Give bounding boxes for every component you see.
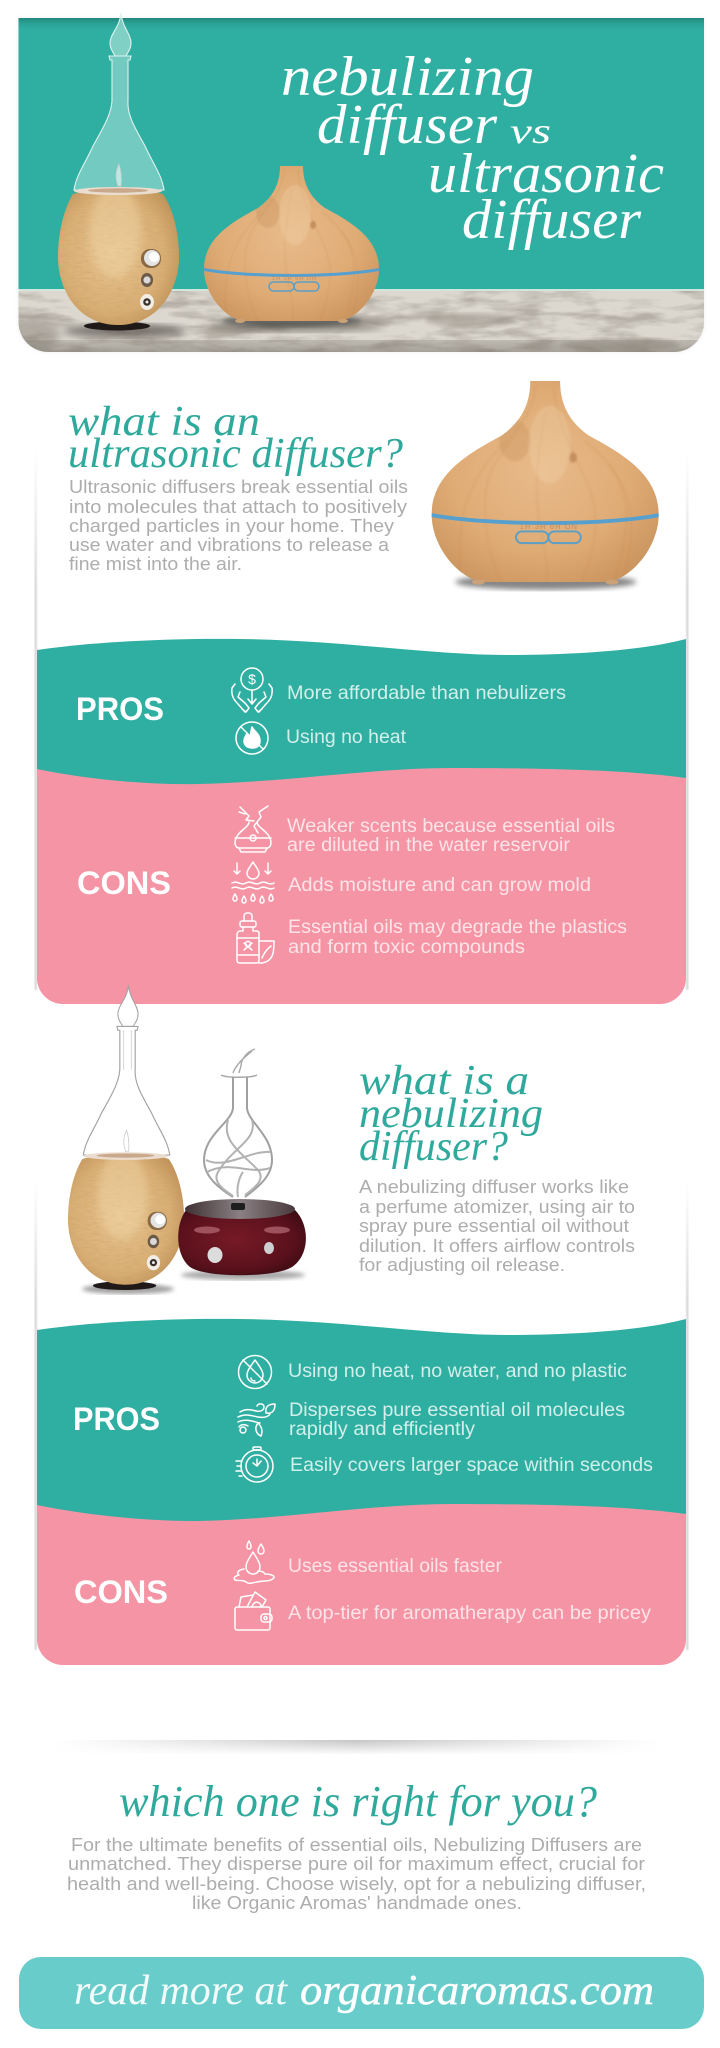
heading: which one is right for you: which one is right for you? xyxy=(119,1777,597,1826)
heading: what is a nebulizing diffuser: diffuser? xyxy=(359,1124,508,1170)
text block: ultrasonic description: use water and vibrations to release a xyxy=(69,535,390,555)
text: weaker scents: are diluted in the water reservoir xyxy=(287,835,571,856)
title: vs xyxy=(510,111,551,151)
title xyxy=(281,46,664,251)
text block: conclusion: For the ultimate benefits of essential oils, Nebulizing Diffusers are xyxy=(71,1835,642,1855)
image: nebulizing diffuser xyxy=(55,13,183,330)
text: weaker scents xyxy=(287,816,615,856)
text block: nebulizing description: for adjusting oil release. xyxy=(359,1255,565,1275)
icon: moisture xyxy=(232,862,274,903)
heading: what is a nebulizing diffuser: what is a xyxy=(359,1058,529,1104)
text: easily covers: Easily covers larger space within seconds xyxy=(290,1455,653,1476)
call to action banner xyxy=(19,1957,704,2029)
heading: what is an ultrasonic diffuser: ultrasonic diffuser? xyxy=(68,431,403,477)
icon: oil drops and puddle xyxy=(234,1541,274,1583)
text: essential oils degrade: and form toxic compounds xyxy=(288,937,525,958)
panel: nebulizing section xyxy=(34,985,688,1665)
panel: ultrasonic section xyxy=(34,381,688,1004)
text: disperses pure oil: rapidly and efficiently xyxy=(289,1419,476,1440)
icon: cracked diffuser xyxy=(235,806,271,852)
text block: conclusion xyxy=(67,1835,646,1913)
text block: ultrasonic description: into molecules that attach to positively xyxy=(69,497,407,517)
text block: ultrasonic description xyxy=(69,477,408,574)
text block: nebulizing description: spray pure essential oil without xyxy=(359,1216,629,1236)
heading: what is an ultrasonic diffuser: what is an xyxy=(68,399,260,445)
icon: oil bottle and leaf xyxy=(237,913,274,963)
image: nebulizing diffuser with wood base xyxy=(65,985,188,1294)
text: more affordable: More affordable than nebulizers xyxy=(287,683,566,704)
title: diffuser xyxy=(317,94,497,156)
text: disperses pure oil xyxy=(289,1400,625,1440)
card side shadows xyxy=(34,1180,688,1650)
title: ultrasonic xyxy=(428,143,664,205)
title: diffuser xyxy=(462,189,641,251)
heading: what is a nebulizing diffuser xyxy=(359,1058,543,1170)
icon: wind and drops xyxy=(238,1404,275,1436)
panel: cons xyxy=(37,768,686,1004)
text block: conclusion: health and well-being. Choose wisely, opt for a nebulizing diffuser, xyxy=(67,1874,646,1894)
text block: conclusion: unmatched. They disperse pure oil for maximum effect, crucial for xyxy=(68,1854,645,1874)
text: adds moisture: Adds moisture and can grow mold xyxy=(288,875,591,896)
icon: hands and coin: $ xyxy=(248,671,256,687)
image: spiral glass nebulizer with dark wood base xyxy=(178,1049,306,1280)
text: top tier pricey: A top-tier for aromatherapy can be pricey xyxy=(288,1603,652,1624)
title: nebulizing xyxy=(281,46,534,108)
text block: ultrasonic description: fine mist into the air. xyxy=(69,554,242,574)
label: CONS: CONS xyxy=(74,1574,168,1610)
label: PROS: PROS xyxy=(73,1401,160,1437)
icon: no water xyxy=(238,1356,272,1388)
icon: stopwatch xyxy=(236,1447,273,1482)
text: disperses pure oil: Disperses pure essential oil molecules xyxy=(289,1400,625,1421)
text: weaker scents: Weaker scents because essential oils xyxy=(287,816,615,837)
panel: cons xyxy=(37,1504,686,1665)
text block: nebulizing description: a perfume atomizer, using air to xyxy=(359,1197,635,1217)
image: ultrasonic diffuser xyxy=(204,166,379,327)
panel: header banner xyxy=(0,13,704,353)
label: PROS: PROS xyxy=(76,691,164,727)
text block: conclusion: like Organic Aromas' handmade ones. xyxy=(192,1893,522,1913)
label: CONS: CONS xyxy=(77,865,171,901)
text block: ultrasonic description: charged particles in your home. They xyxy=(69,516,394,536)
divider shadow xyxy=(50,1740,664,1755)
text block: nebulizing description: A nebulizing diffuser works like xyxy=(359,1177,629,1197)
text: essential oils degrade xyxy=(288,917,627,958)
text: no heat no water: Using no heat, no water, and no plastic xyxy=(288,1361,627,1382)
heading: what is an ultrasonic diffuser xyxy=(68,399,403,477)
text: read more at: read more at xyxy=(74,1968,288,2014)
icon: wallet xyxy=(235,1592,272,1630)
text: website: organicaromas.com xyxy=(300,1968,654,2014)
card side shadows xyxy=(34,450,688,990)
text block: ultrasonic description: Ultrasonic diffusers break essential oils xyxy=(69,477,408,497)
heading: what is a nebulizing diffuser: nebulizing xyxy=(359,1091,543,1137)
text: essential oils degrade: Essential oils may degrade the plastics xyxy=(288,917,627,938)
panel: pros xyxy=(37,639,686,785)
text: uses oil faster: Uses essential oils faster xyxy=(288,1556,503,1577)
icon: hands and coin xyxy=(232,668,272,712)
icon: no heat xyxy=(236,722,268,754)
panel: pros xyxy=(37,1319,686,1525)
image: ultrasonic diffuser large xyxy=(432,381,659,590)
text block: nebulizing description xyxy=(359,1177,635,1275)
text: using no heat: Using no heat xyxy=(286,727,407,748)
text block: nebulizing description: dilution. It offers airflow controls xyxy=(359,1236,635,1256)
